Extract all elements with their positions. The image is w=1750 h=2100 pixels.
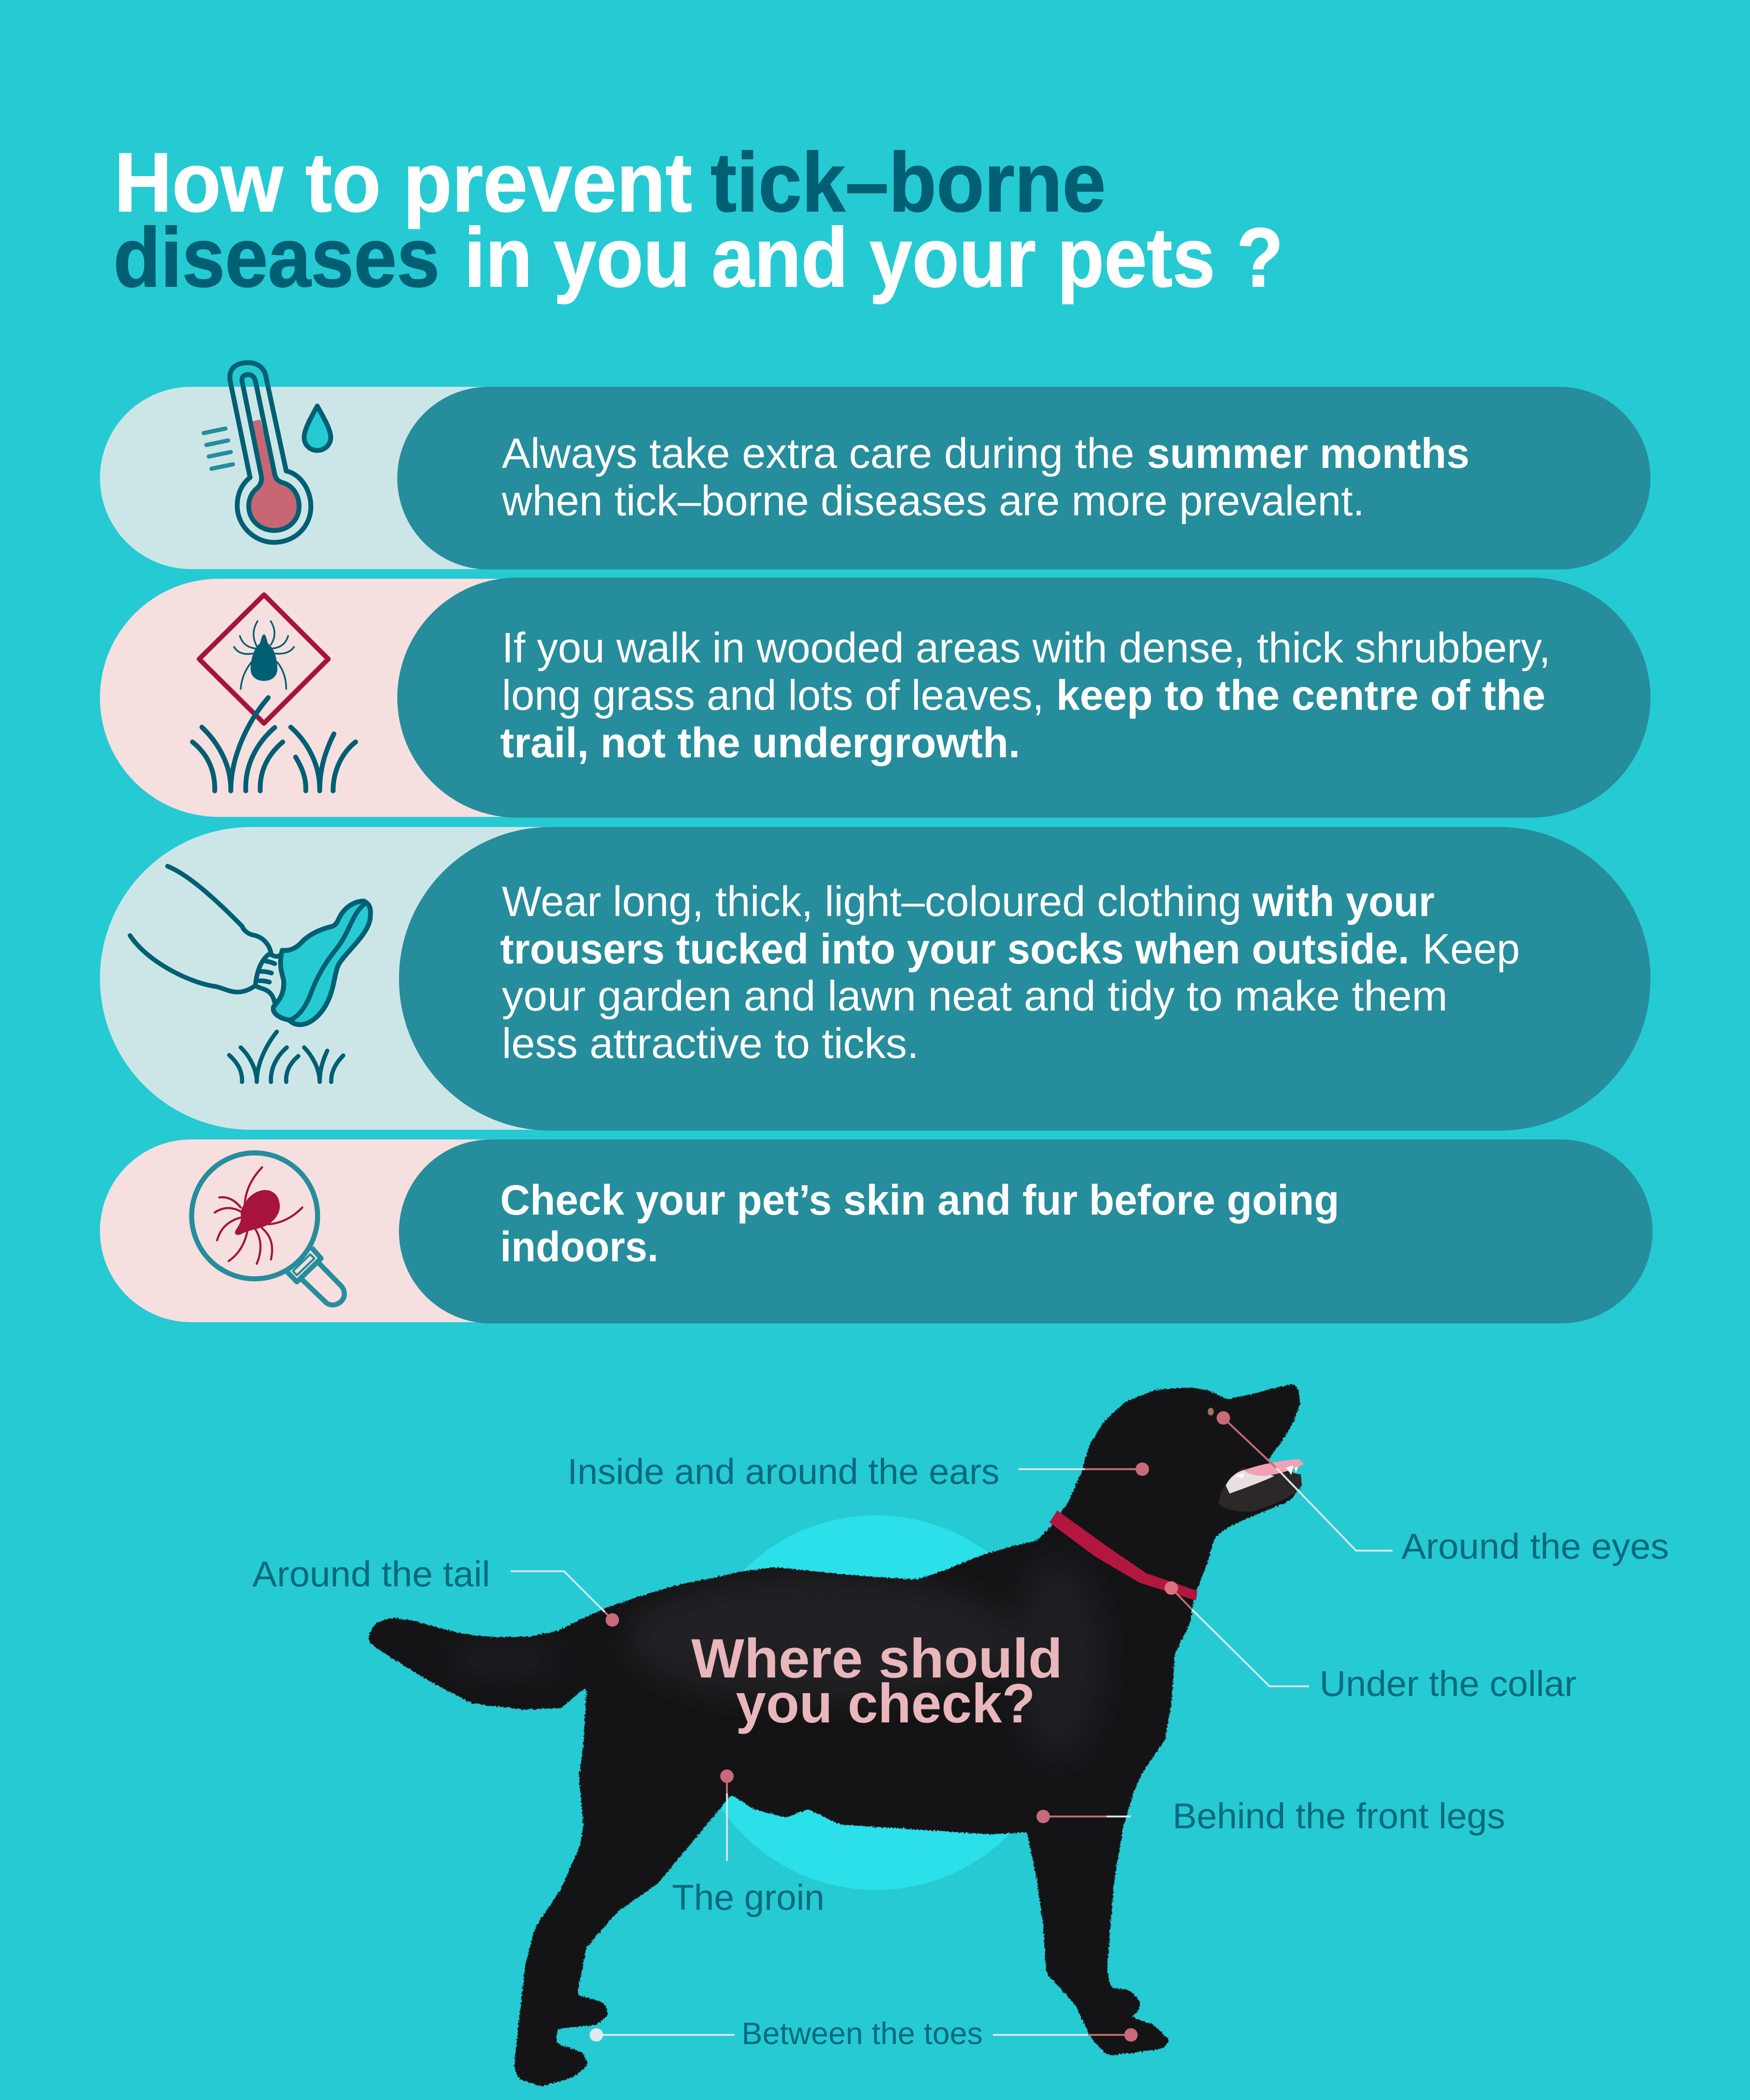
highlight circle behind dog bbox=[689, 1515, 1063, 1890]
dog photo silhouette bbox=[370, 1384, 1304, 2087]
heading: where should you check: Where should bbox=[691, 1628, 1063, 1689]
callout: tail: Around the tail bbox=[252, 1554, 490, 1594]
icon: tick warning sign and grass bbox=[192, 595, 356, 791]
text: wooded areas: trail, not the undergrowth. bbox=[500, 719, 1020, 766]
text: clothing bbox=[500, 878, 1520, 1067]
text: clothing: your garden and lawn neat and tidy to make them bbox=[502, 973, 1448, 1020]
text: check your pet: indoors. bbox=[500, 1223, 659, 1270]
text: wooded areas: long grass and lots of leaves, bbox=[502, 672, 1044, 719]
text: check your pet bbox=[500, 1177, 1339, 1270]
text: check your pet: Check your pet’s skin and fur before going bbox=[500, 1177, 1339, 1224]
heading: where should you check bbox=[691, 1628, 1063, 1734]
dog collar bbox=[1049, 1510, 1197, 1601]
dog mouth and tongue bbox=[1208, 1408, 1304, 1512]
callout: collar bbox=[1165, 1581, 1577, 1704]
text: summer months: Always take extra care during the bbox=[502, 430, 1134, 477]
callout: ears: Inside and around the ears bbox=[567, 1452, 1000, 1492]
text: summer months: summer months bbox=[1147, 430, 1469, 477]
callout: collar: Under the collar bbox=[1320, 1664, 1577, 1704]
callout: toes bbox=[590, 2016, 1138, 2051]
icon: thermometer and droplet bbox=[204, 363, 331, 542]
callout: front legs: Behind the front legs bbox=[1173, 1796, 1505, 1836]
heading: where should you check: you check? bbox=[736, 1672, 1035, 1734]
chart: where should you check bbox=[252, 1384, 1669, 2087]
panel: clothing bbox=[100, 827, 1650, 1131]
callout: toes: Between the toes bbox=[742, 2016, 983, 2051]
text: wooded areas bbox=[500, 625, 1551, 766]
callout: eyes bbox=[1217, 1411, 1669, 1567]
callout: front legs bbox=[1036, 1796, 1505, 1836]
panel: wooded areas bbox=[100, 578, 1650, 818]
title: How to prevent bbox=[114, 136, 692, 229]
text: summer months bbox=[501, 430, 1469, 525]
text: clothing: with your bbox=[1252, 878, 1435, 925]
text: clothing: less attractive to ticks. bbox=[502, 1020, 919, 1067]
text: wooded areas: keep to the centre of the bbox=[1056, 672, 1545, 719]
title bbox=[113, 136, 1283, 304]
title: diseases bbox=[113, 211, 440, 304]
panel: check your pet bbox=[100, 1139, 1653, 1323]
callout: tail bbox=[252, 1554, 619, 1627]
text: clothing: trousers tucked into your socks when outside. bbox=[500, 926, 1409, 973]
panel: summer months bbox=[100, 363, 1650, 570]
text: clothing: Keep bbox=[1422, 926, 1520, 973]
icon: magnifying glass with tick bbox=[192, 1153, 344, 1305]
icon: leg with sock and shoe over grass bbox=[130, 866, 370, 1082]
title: tick–borne bbox=[711, 136, 1106, 229]
callout: groin bbox=[672, 1769, 824, 1918]
text: clothing: Wear long, thick, light–coloured clothing bbox=[502, 878, 1241, 925]
callout: groin: The groin bbox=[672, 1878, 824, 1918]
title: in you and your pets ? bbox=[464, 211, 1283, 304]
text: wooded areas: If you walk in wooded areas with dense, thick shrubbery, bbox=[502, 625, 1551, 672]
callout: eyes: Around the eyes bbox=[1401, 1527, 1669, 1567]
text: summer months: when tick–borne diseases are more prevalent. bbox=[501, 478, 1364, 525]
